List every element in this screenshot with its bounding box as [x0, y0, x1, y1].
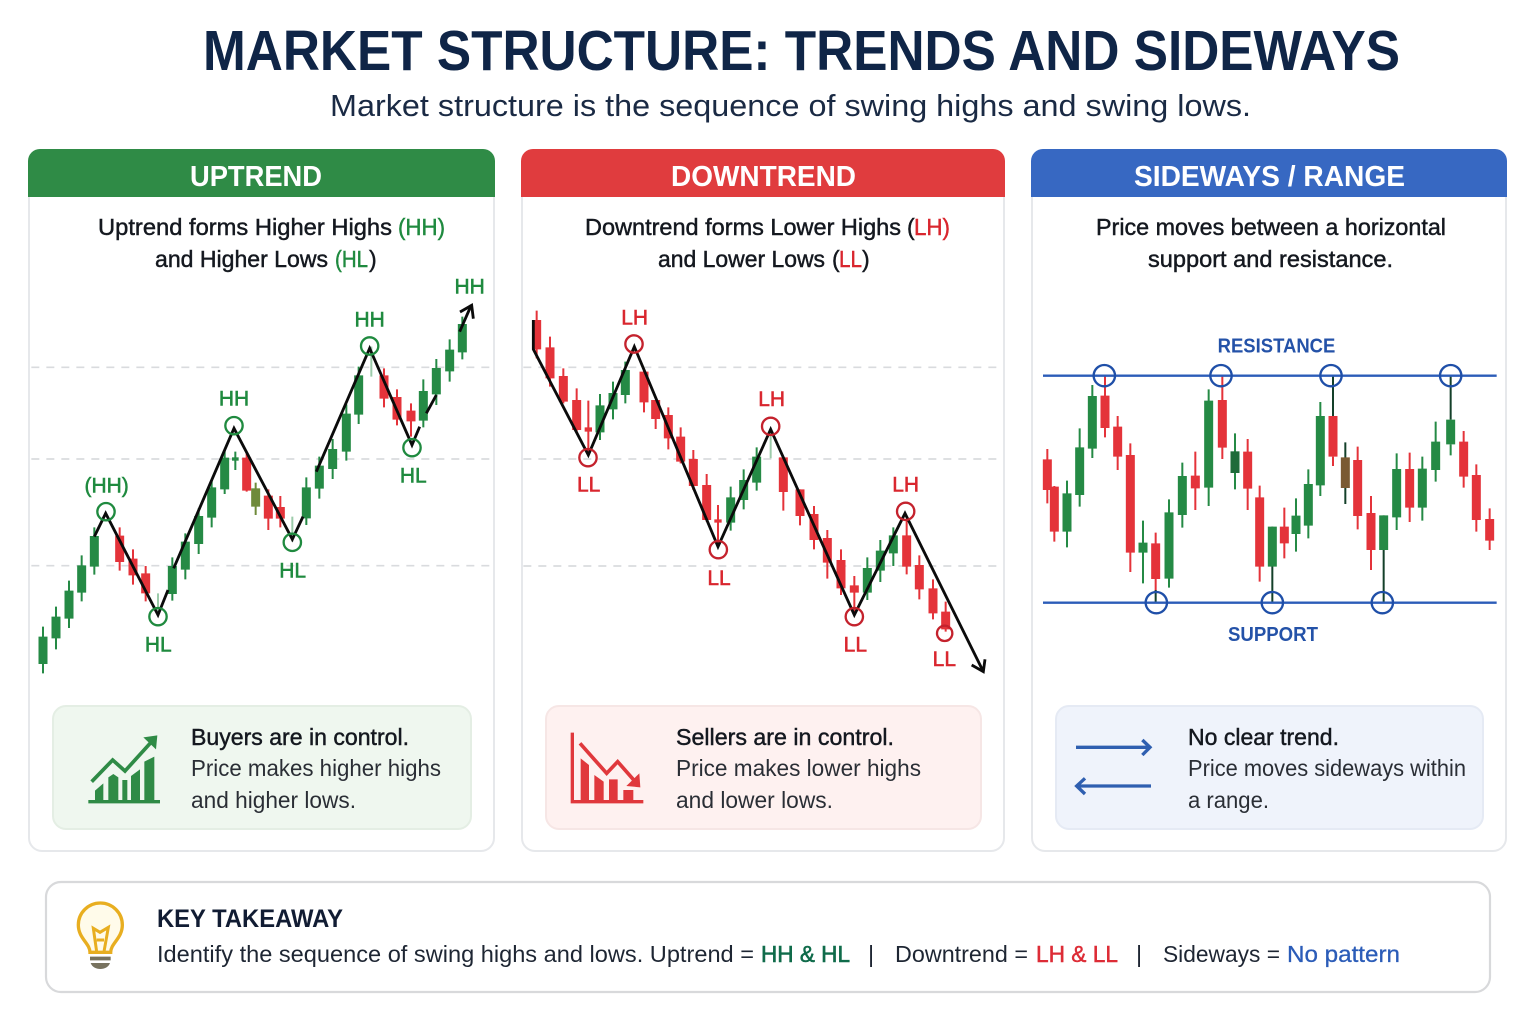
downtrend description: LH)	[914, 214, 950, 240]
no trend text: No clear trend.	[1188, 724, 1339, 750]
icon: rising chart	[88, 735, 160, 802]
key takeaway sentence	[157, 941, 1400, 967]
swing point circles	[97, 337, 421, 625]
key takeaway sentence: Downtrend =	[895, 941, 1028, 967]
resistance label: RESISTANCE	[1218, 334, 1335, 357]
buyers text: Price makes higher highs	[191, 755, 441, 781]
uptrend description: )	[369, 246, 377, 272]
support line	[1043, 592, 1497, 613]
swing labels: LL	[933, 648, 956, 671]
uptrend description	[98, 214, 445, 272]
swing labels: HH	[355, 309, 385, 332]
sellers text	[676, 724, 921, 813]
swing labels: HL	[400, 465, 427, 488]
key takeaway sentence: |	[868, 941, 874, 967]
swing labels: LH	[758, 388, 785, 411]
no trend text: a range.	[1188, 787, 1269, 813]
resistance line	[1043, 365, 1497, 386]
key takeaway sentence: HH & HL	[761, 941, 850, 967]
swing labels: (HH)	[85, 474, 129, 497]
zigzag price line	[94, 305, 473, 615]
key takeaway sentence: LH & LL	[1036, 941, 1118, 967]
downtrend info box	[546, 706, 981, 829]
uptrend candlestick chart	[31, 275, 493, 673]
swing labels: HH	[219, 388, 249, 411]
panel: sideways range	[1031, 149, 1507, 851]
swing labels: HL	[145, 634, 172, 657]
support label: SUPPORT	[1228, 623, 1318, 646]
uptrend header: UPTREND	[190, 161, 322, 193]
swing point circles	[579, 335, 952, 641]
downtrend description	[585, 214, 950, 272]
swing labels: HH	[455, 275, 485, 298]
range candlestick chart	[1043, 334, 1497, 646]
sideways header: SIDEWAYS / RANGE	[1134, 161, 1405, 193]
uptrend description: and Higher Lows	[155, 246, 328, 272]
no trend text	[1188, 724, 1466, 813]
downtrend header	[521, 149, 1005, 197]
downtrend header: DOWNTREND	[671, 161, 856, 193]
swing labels: LH	[892, 474, 919, 497]
icon: horizontal arrows	[1076, 740, 1151, 794]
swing labels: HL	[279, 559, 306, 582]
no trend text: Price moves sideways within	[1188, 755, 1466, 781]
swing labels: LL	[844, 633, 867, 656]
key takeaway sentence: Sideways =	[1163, 941, 1280, 967]
buyers text: Buyers are in control.	[191, 724, 409, 750]
swing labels	[577, 306, 956, 671]
downtrend description: LL	[839, 246, 862, 272]
sellers text: Price makes lower highs	[676, 755, 921, 781]
panel: uptrend	[28, 149, 495, 851]
swing labels: LL	[577, 474, 600, 497]
uptrend description: Uptrend forms Higher Highs	[98, 214, 392, 240]
downtrend description: )	[862, 246, 870, 272]
key takeaway sentence: No pattern	[1287, 941, 1400, 967]
sideways description: Price moves between a horizontal	[1096, 214, 1446, 240]
key takeaway heading: KEY TAKEAWAY	[157, 905, 343, 933]
downtrend description: Downtrend forms Lower Highs	[585, 214, 901, 240]
icon: light bulb	[78, 903, 122, 969]
icon: falling chart	[572, 733, 643, 802]
subtitle: Market structure is the sequence of swing highs and swing lows.	[330, 88, 1251, 123]
sideways description: support and resistance.	[1148, 246, 1393, 272]
swing labels: LH	[621, 306, 648, 329]
title: MARKET STRUCTURE: TRENDS AND SIDEWAYS	[203, 19, 1400, 83]
buyers text: and higher lows.	[191, 787, 356, 813]
sideways description	[1096, 214, 1446, 272]
sellers text: and lower lows.	[676, 787, 833, 813]
zigzag price line	[533, 320, 985, 672]
key takeaway panel	[46, 882, 1490, 992]
swing labels: LL	[707, 567, 731, 590]
uptrend info box	[53, 706, 471, 829]
uptrend description: (HH)	[398, 214, 445, 240]
buyers text	[191, 724, 441, 813]
downtrend description: (	[832, 246, 840, 272]
key takeaway sentence: |	[1136, 941, 1142, 967]
panel: downtrend	[521, 149, 1005, 851]
sideways header	[1031, 149, 1507, 197]
uptrend description: (HL	[335, 246, 368, 272]
sellers text: Sellers are in control.	[676, 724, 894, 750]
swing labels	[85, 275, 485, 657]
downtrend description: (	[907, 214, 915, 240]
sideways info box	[1056, 706, 1483, 829]
uptrend header	[28, 149, 495, 197]
downtrend description: and Lower Lows	[658, 246, 825, 272]
key takeaway sentence: Identify the sequence of swing highs and lows. Uptrend =	[157, 941, 754, 967]
downtrend candlestick chart	[523, 306, 1000, 672]
